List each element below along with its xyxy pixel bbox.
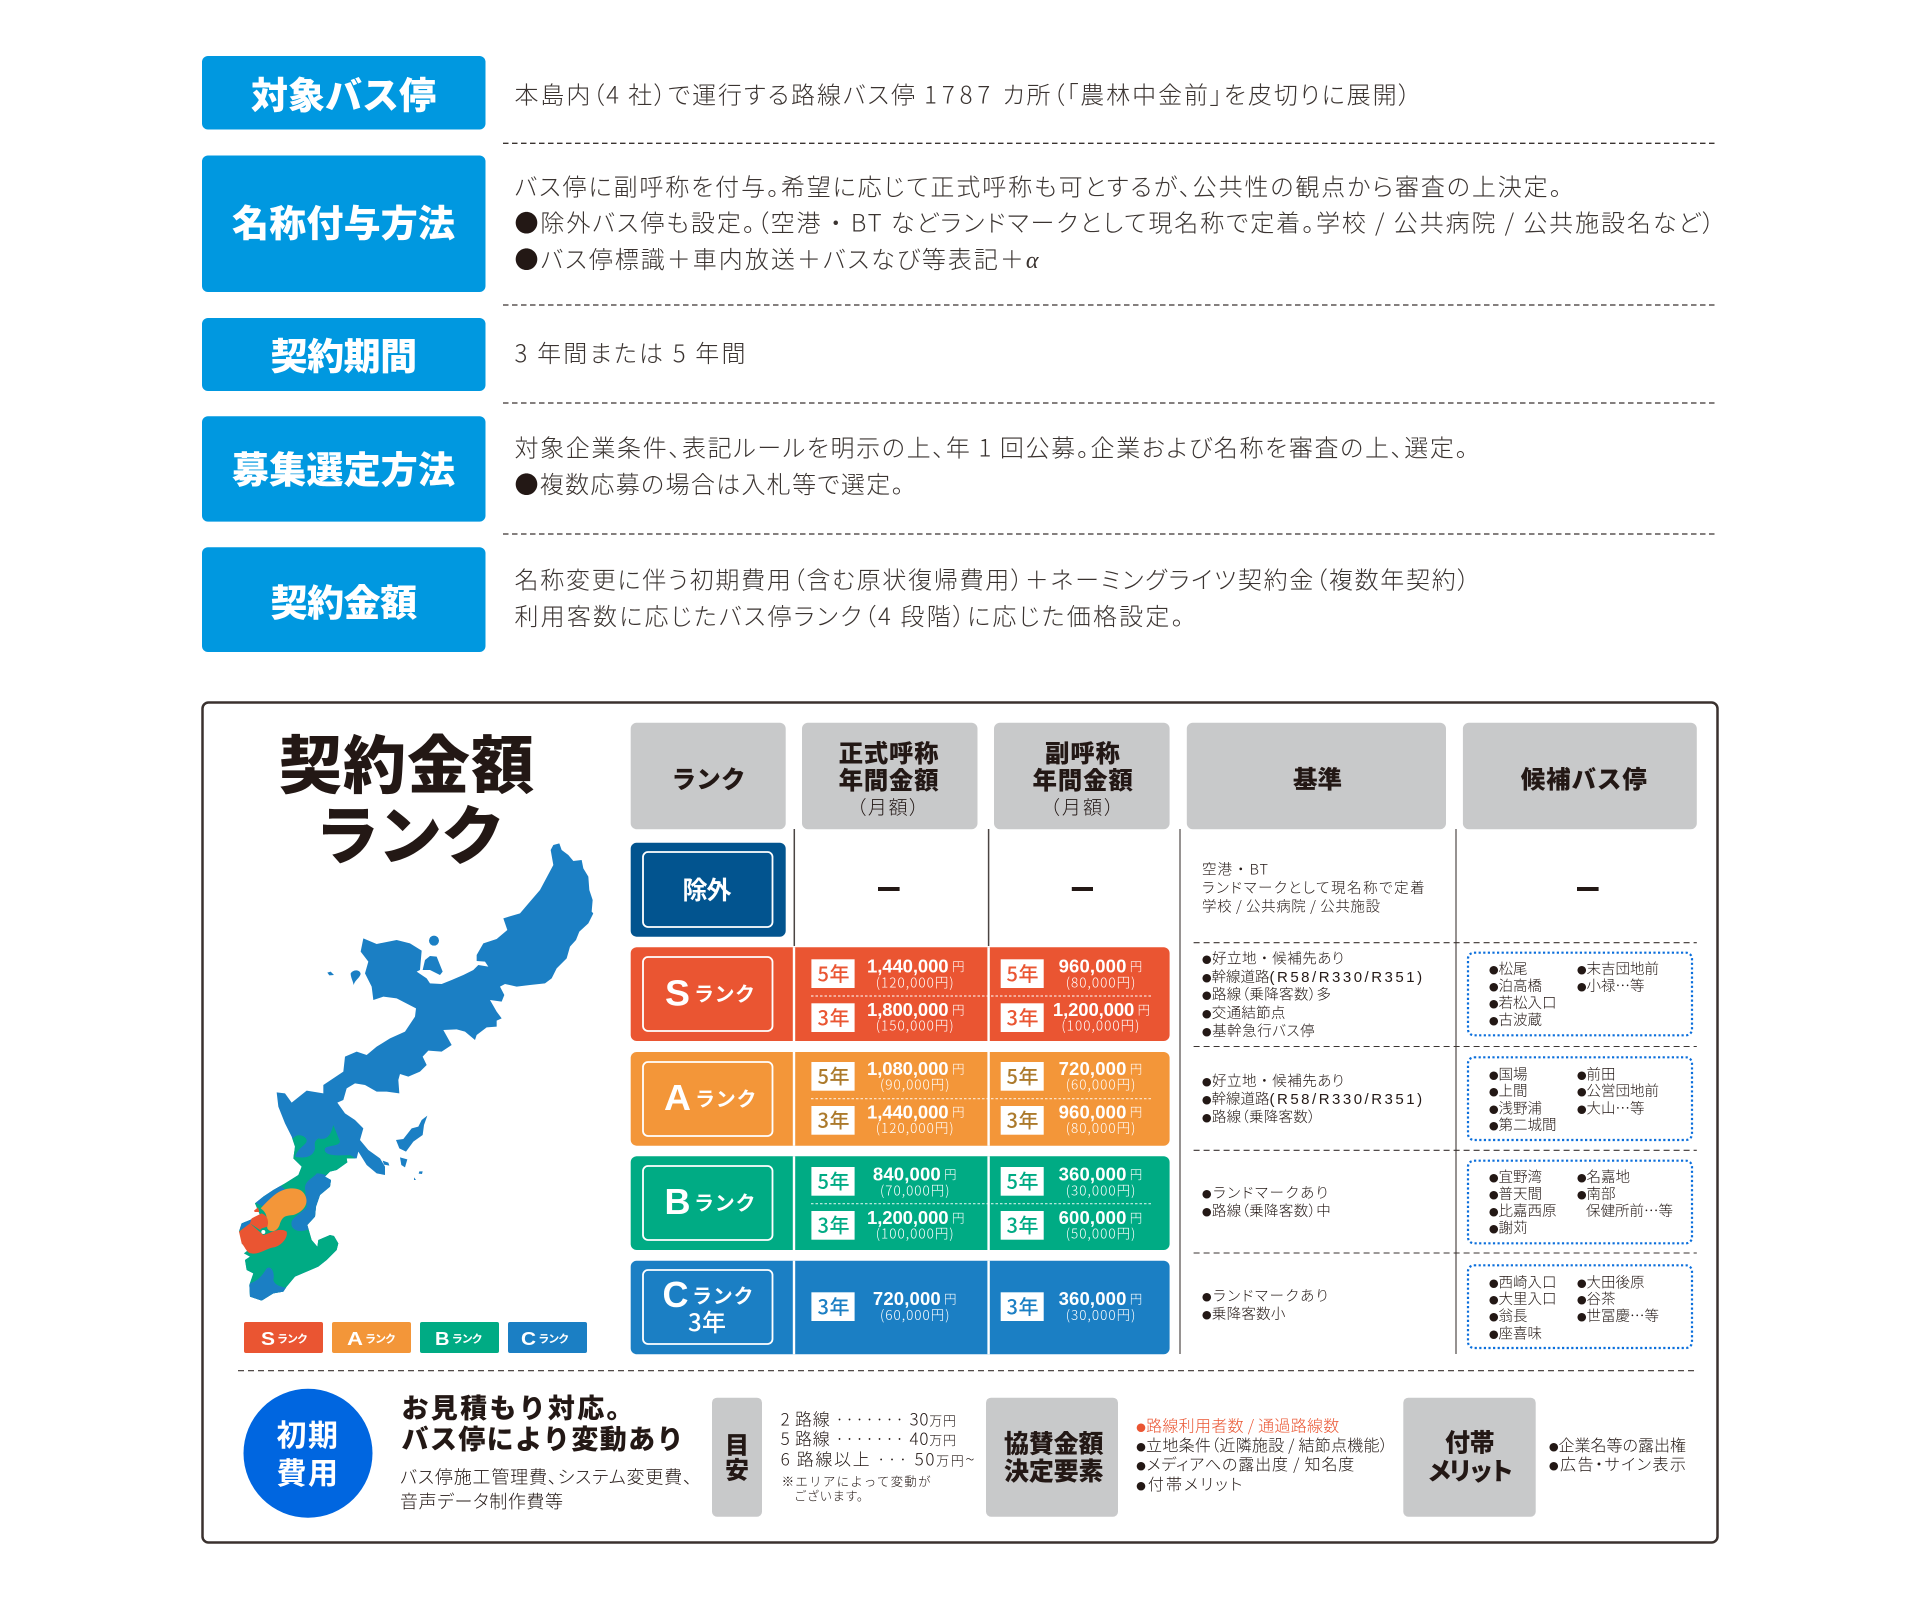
prices: B secondary: 円 (1130, 1207, 1142, 1226)
row label: target bus stops (202, 56, 486, 130)
candidate stops: A: ●上間 (1489, 1080, 1528, 1101)
candidate stops: A: ●国場 (1489, 1064, 1528, 1084)
table header (631, 723, 1697, 829)
rank band: S: ランク (694, 978, 755, 1007)
header: criteria (1187, 723, 1446, 829)
candidate stops: B: ●宜野湾 (1489, 1166, 1542, 1187)
candidate stops: A: ●前田 (1577, 1064, 1616, 1084)
text: A criteria (1202, 1070, 1425, 1127)
text: S criteria: ●交通結節点 (1202, 1002, 1285, 1023)
row label: naming method (202, 156, 486, 292)
text: initial cost note: 音声データ制作費等 (400, 1488, 563, 1514)
prices: B secondary: (30,000円) (1066, 1179, 1135, 1199)
label: added merit (1403, 1398, 1536, 1517)
text: C criteria: ●乗降客数小 (1202, 1303, 1286, 1324)
text: C criteria: ●ランドマークあり (1202, 1285, 1328, 1306)
prices: S secondary: 3年 (1006, 1002, 1038, 1031)
header: official name annual price: 年間金額 (839, 762, 939, 797)
prices: B official (811, 1164, 965, 1243)
candidate stops: C: ●谷茶 (1577, 1288, 1616, 1309)
rank band: C (631, 1261, 1170, 1354)
candidate stops: B: ●比嘉西原 (1489, 1200, 1557, 1221)
prices: B official: 840,000 (873, 1164, 941, 1185)
prices: B secondary: 600,000 (1059, 1207, 1126, 1228)
prices: B secondary: 円 (1130, 1164, 1142, 1183)
prices: S official: 円 (952, 956, 965, 975)
candidate stops: S: ●末吉団地前 (1577, 958, 1659, 979)
initial cost badge: 初期 (276, 1411, 338, 1455)
candidate stops: C: ●西崎入口 (1489, 1272, 1557, 1292)
header: secondary name annual price: （月額） (1050, 793, 1114, 820)
header: secondary name annual price: 副呼称 (1045, 735, 1120, 770)
prices: B official: 5年 (818, 1166, 850, 1195)
legend: B rank: ランク (452, 1332, 483, 1346)
text: contract amount: 名称変更に伴う初期費用（含む原状復帰費用）＋ネーミングライツ契約金（複数年契約） (514, 560, 1470, 596)
prices: A official: 5年 (818, 1061, 850, 1090)
header: criteria: 基準 (1293, 761, 1342, 796)
legend (244, 1322, 587, 1353)
prices: B official: (100,000円) (876, 1223, 954, 1243)
candidate stops: A: ●第二城間 (1489, 1114, 1557, 1135)
text: S criteria: ●路線（乗降客数）多 (1202, 984, 1331, 1004)
candidate stops: B: ●南部 (1577, 1183, 1616, 1204)
prices: C secondary: (30,000円) (1066, 1304, 1135, 1324)
legend: A rank (332, 1322, 411, 1353)
label: guideline: 目 (725, 1426, 749, 1460)
prices: S official (811, 956, 965, 1035)
header: candidate bus stops: 候補バス停 (1521, 761, 1647, 796)
text: A criteria: ●路線（乗降客数） (1202, 1106, 1315, 1127)
rank band: C: ランク (692, 1280, 754, 1309)
header: official name annual price: （月額） (856, 793, 919, 820)
prices: S official: 1,800,000 (867, 999, 949, 1020)
text: excluded criteria: ランドマークとして現名称で定着 (1202, 877, 1425, 898)
text: excluded criteria: 空港 ・ BT (1202, 858, 1268, 880)
prices: B secondary: (50,000円) (1066, 1223, 1135, 1243)
text: guideline prices: ございます。 (794, 1486, 869, 1504)
candidate stops: S: ●小禄…等 (1577, 975, 1645, 996)
rank badge: excluded: 除外 (682, 871, 732, 907)
text: sponsorship factors (1136, 1412, 1388, 1495)
text: initial cost note: お見積もり対応。 (402, 1387, 634, 1426)
panel: contract amount ranks (202, 702, 1718, 1542)
prices: B secondary (1001, 1164, 1142, 1243)
section: contract overview (202, 56, 1715, 652)
text: C criteria (1202, 1285, 1328, 1324)
rank badge: excluded (631, 843, 786, 937)
rank band: B (631, 1156, 1170, 1250)
prices: A secondary: 3年 (1006, 1105, 1038, 1134)
text: contract amount: 利用客数に応じたバス停ランク（4 段階）に応じた価格設定。 (514, 597, 1184, 632)
initial cost badge: 費用 (276, 1449, 338, 1493)
prices: A official: 1,440,000 (867, 1101, 949, 1122)
candidate stops: S: ●松尾 (1489, 958, 1528, 979)
prices: S secondary: 円 (1138, 999, 1150, 1018)
text: initial cost note: バス停施工管理費、システム変更費、 (400, 1464, 692, 1490)
label: guideline: 安 (725, 1450, 749, 1486)
label: guideline (712, 1398, 762, 1517)
prices: A official: 1,080,000 (867, 1058, 949, 1079)
legend: S rank (244, 1322, 323, 1353)
prices: A secondary: 円 (1130, 1058, 1142, 1077)
prices: S official: 3年 (818, 1002, 850, 1031)
prices: A secondary: (80,000円) (1066, 1117, 1135, 1137)
candidate stops: C: ●大田後原 (1577, 1272, 1645, 1292)
text: contract period: 3 年間または 5 年間 (514, 334, 746, 369)
legend: A rank: A (347, 1329, 363, 1349)
title: ランク (315, 786, 505, 878)
label: added merit: 付帯 (1445, 1424, 1495, 1460)
legend: A rank: ランク (365, 1332, 396, 1346)
candidate stops: C: ●座喜味 (1489, 1322, 1542, 1344)
text: added merit: ●企業名等の露出権 (1549, 1432, 1686, 1456)
header: secondary name annual price: 年間金額 (1032, 762, 1133, 797)
text: selection method (514, 429, 1468, 500)
candidate stops: C: ●翁長 (1489, 1305, 1528, 1326)
text: naming method: ●除外バス停も設定。（空港 ・ BT などランドマークとして現名称で定着。学校 / 公共病院 / 公共施設名など） (514, 204, 1714, 239)
row label: contract amount: 契約金額 (271, 573, 417, 627)
candidate stops: S: ●若松入口 (1489, 992, 1557, 1013)
map: Okinawa rank areas (239, 844, 594, 1301)
prices: A secondary (1001, 1058, 1142, 1137)
text: sponsorship factors: ●メディアへの露出度 / 知名度 (1136, 1451, 1354, 1475)
rank band: S (631, 947, 1170, 1041)
prices: S official: 円 (952, 999, 965, 1018)
text: guideline prices (781, 1406, 974, 1504)
candidate stops: B (1468, 1161, 1692, 1243)
title: 契約金額 (279, 716, 534, 807)
text: sponsorship factors: ●付帯メリット (1136, 1471, 1242, 1495)
prices: B official: 円 (944, 1164, 957, 1183)
prices: C official: 720,000 (873, 1288, 941, 1309)
prices: S secondary: 1,200,000 (1053, 999, 1134, 1020)
row: C rank (631, 1261, 1692, 1354)
candidate stops: C: ●大里入口 (1489, 1288, 1557, 1309)
candidate stops: B: ●謝苅 (1489, 1217, 1528, 1238)
prices: B secondary: 3年 (1006, 1210, 1038, 1239)
prices: B secondary: 5年 (1006, 1166, 1038, 1195)
text: sponsorship factors: ●立地条件（近隣施設 / 結節点機能） (1136, 1432, 1388, 1456)
prices: A official (811, 1058, 965, 1137)
prices: B secondary: 360,000 (1059, 1164, 1126, 1185)
row: B rank (631, 1156, 1692, 1250)
legend: B rank (420, 1322, 499, 1353)
text: excluded criteria: 学校 / 公共病院 / 公共施設 (1202, 896, 1380, 916)
text: A criteria: ●好立地 ・ 候補先あり (1202, 1070, 1344, 1091)
prices: C official: 3年 (818, 1291, 850, 1320)
prices: S secondary: 960,000 (1059, 956, 1126, 977)
header: secondary name annual price (994, 723, 1170, 829)
row label: contract period: 契約期間 (271, 326, 417, 380)
legend: C rank: ランク (538, 1332, 569, 1346)
legend: B rank: B (435, 1329, 450, 1349)
prices: S official: 1,440,000 (867, 956, 949, 977)
text: naming method (514, 168, 1714, 275)
label: added merit: メリット (1427, 1452, 1514, 1488)
candidate stops: S: ●泊高橋 (1489, 975, 1542, 996)
text: contract amount (514, 560, 1470, 632)
prices: A secondary: (60,000円) (1066, 1073, 1135, 1093)
prices: A official: (90,000円) (880, 1073, 950, 1093)
candidate stops: A: ●公営団地前 (1577, 1080, 1659, 1101)
prices: B official: 円 (952, 1207, 965, 1226)
text: S criteria: ●好立地 ・ 候補先あり (1202, 948, 1344, 968)
rank band: B: B (664, 1181, 690, 1222)
prices: S official: (120,000円) (876, 971, 954, 991)
row: S rank (631, 947, 1692, 1041)
rank band: A (631, 1052, 1170, 1146)
text: A criteria: ●幹線道路(R58/R330/R351) (1202, 1088, 1425, 1109)
prices: S secondary: 円 (1130, 956, 1142, 975)
candidate stops: C: ●世冨慶…等 (1577, 1305, 1659, 1326)
candidate stops: B: 保健所前…等 (1586, 1200, 1673, 1221)
text: initial cost note: バス停により変動あり (402, 1418, 684, 1457)
candidate stops: S (1468, 953, 1692, 1035)
initial cost badge (244, 1389, 372, 1518)
prices: S secondary (1001, 956, 1150, 1035)
prices: C secondary (1001, 1288, 1142, 1324)
rank band: C: 3年 (688, 1303, 726, 1338)
prices: S secondary: (100,000円) (1061, 1015, 1139, 1035)
row label: selection method: 募集選定方法 (232, 440, 455, 494)
label: sponsorship factors: 決定要素 (1004, 1452, 1104, 1488)
row label: selection method (202, 416, 486, 522)
rank band: B: ランク (694, 1187, 756, 1216)
prices: A official: (120,000円) (876, 1117, 954, 1137)
prices: C secondary: 円 (1130, 1288, 1142, 1307)
text: B criteria: ●路線（乗降客数）中 (1202, 1200, 1331, 1221)
prices: A secondary: 720,000 (1059, 1058, 1126, 1079)
text: sponsorship factors: ●路線利用者数 / 通過路線数 (1136, 1412, 1339, 1436)
header: rank: ランク (672, 761, 746, 796)
text: naming method: ●バス停標識＋車内放送＋バスなび等表記＋α (514, 240, 1039, 275)
prices: S official: (150,000円) (876, 1015, 954, 1035)
text: guideline prices: 2 路線 ······· 30万円 (781, 1406, 956, 1430)
text: target bus stops: 本島内（4 社）で運行する路線バス停 1787 カ所（「農林中金前」を皮切りに展開） (514, 76, 1410, 111)
row label: contract period (202, 318, 486, 391)
candidate stops: C (1468, 1265, 1692, 1348)
header: official name annual price: 正式呼称 (839, 735, 939, 770)
prices: A secondary: 円 (1130, 1102, 1142, 1121)
candidate stops: S: ●古波蔵 (1489, 1009, 1542, 1030)
prices: B official: (70,000円) (880, 1179, 950, 1199)
label: sponsorship factors (986, 1398, 1118, 1517)
rank band: S: S (665, 972, 690, 1014)
prices: S secondary: 5年 (1006, 958, 1038, 987)
prices: S official: 5年 (818, 958, 850, 987)
candidate stops: A: ●浅野浦 (1489, 1098, 1542, 1118)
prices: C official: (60,000円) (880, 1304, 950, 1324)
header: rank (631, 723, 786, 829)
prices: A official: 3年 (818, 1105, 850, 1134)
rank band: A: A (664, 1077, 691, 1118)
prices: C official (811, 1288, 957, 1324)
legend: S rank: ランク (277, 1332, 308, 1346)
rank band: C: C (662, 1274, 688, 1315)
text: selection method: 対象企業条件、表記ルールを明示の上、年 1 回公募。企業および名称を審査の上、選定。 (514, 429, 1468, 464)
text: guideline prices: 6 路線以上 ··· 50万円~ (781, 1446, 974, 1470)
text: guideline prices: ※エリアによって変動が (782, 1471, 931, 1490)
candidate stops: B: ●普天間 (1489, 1183, 1542, 1204)
rank band: A: ランク (695, 1083, 756, 1112)
legend: S rank: S (261, 1329, 275, 1349)
header: official name annual price (802, 723, 978, 829)
prices: C secondary: 3年 (1006, 1291, 1038, 1320)
prices: B official: 1,200,000 (867, 1207, 949, 1228)
title (279, 716, 534, 878)
header: candidate bus stops (1463, 723, 1697, 829)
candidate stops: B: ●名嘉地 (1577, 1166, 1630, 1187)
prices: C official: 円 (944, 1288, 957, 1307)
text: naming method: バス停に副呼称を付与。希望に応じて正式呼称も可とするが、公共性の観点から審査の上決定。 (514, 168, 1562, 203)
label: sponsorship factors: 協賛金額 (1004, 1424, 1104, 1460)
row label: contract amount (202, 547, 486, 652)
prices: A official: 円 (952, 1102, 965, 1121)
prices: A secondary: 960,000 (1059, 1101, 1126, 1122)
legend: C rank (508, 1322, 587, 1353)
text: B criteria (1202, 1182, 1331, 1221)
legend: C rank: C (521, 1329, 536, 1349)
candidate stops: A: ●大山…等 (1577, 1098, 1645, 1118)
prices: A secondary: 5年 (1006, 1061, 1038, 1090)
prices: B official: 3年 (818, 1210, 850, 1239)
text: added merit: ●広告・サイン表示 (1549, 1451, 1686, 1475)
text: excluded criteria (1202, 858, 1425, 916)
text: guideline prices: 5 路線 ······· 40万円 (781, 1425, 956, 1450)
candidate stops: A (1468, 1057, 1692, 1140)
dashes: none (878, 887, 1599, 891)
text: S criteria (1202, 948, 1425, 1041)
text: initial cost note (400, 1387, 692, 1514)
prices: S secondary: (80,000円) (1066, 971, 1135, 991)
row label: target bus stops: 対象バス停 (251, 65, 436, 119)
text: S criteria: ●幹線道路(R58/R330/R351) (1202, 966, 1425, 987)
text: S criteria: ●基幹急行バス停 (1202, 1020, 1315, 1041)
text: selection method: ●複数応募の場合は入札等で選定。 (514, 465, 904, 500)
row: excluded (631, 843, 1599, 937)
prices: C secondary: 360,000 (1059, 1288, 1126, 1309)
row label: naming method: 名称付与方法 (232, 194, 455, 248)
text: B criteria: ●ランドマークあり (1202, 1182, 1328, 1203)
prices: A official: 円 (952, 1058, 965, 1077)
text: added merit (1549, 1432, 1686, 1475)
row: A rank (631, 1052, 1692, 1146)
